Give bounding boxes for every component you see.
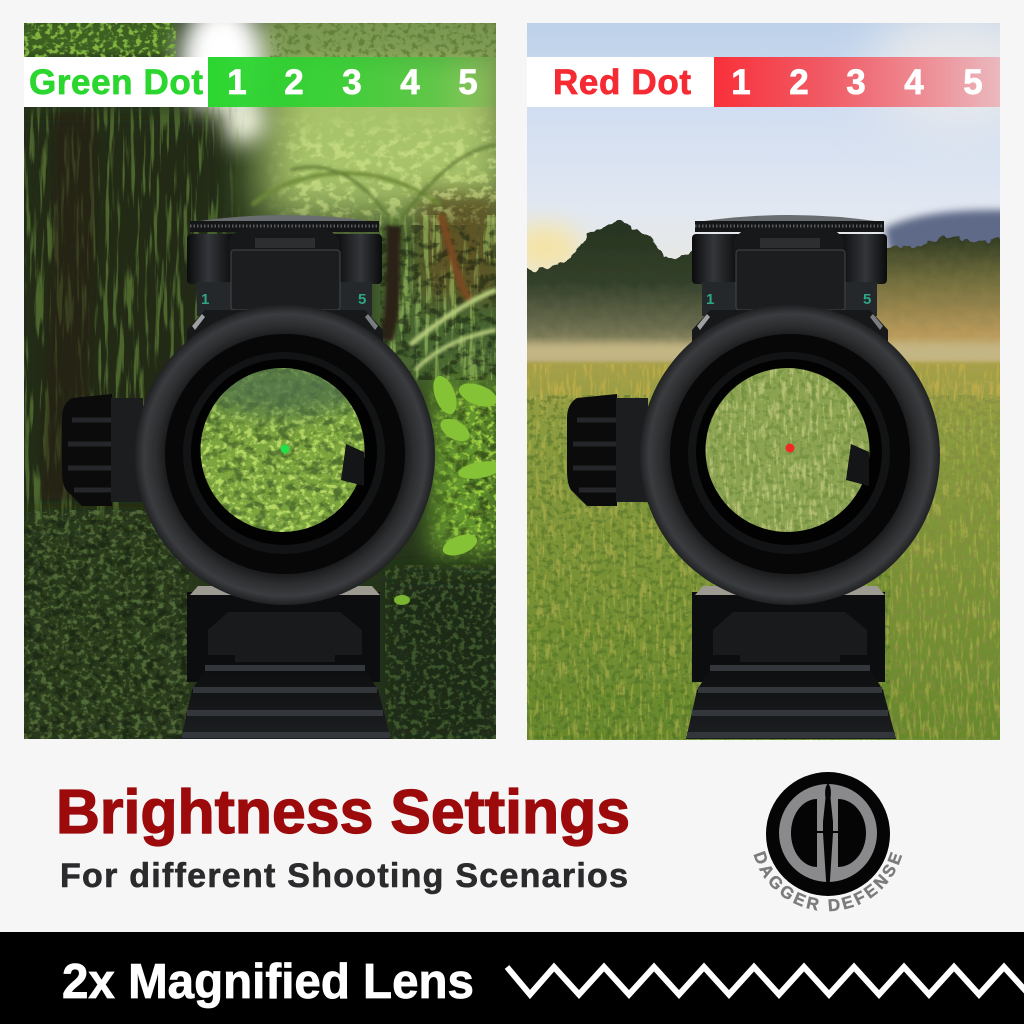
green dot label: Green Dot <box>29 63 203 102</box>
sky <box>527 23 1000 283</box>
brightness levels 1 to 5: 5 <box>963 63 983 102</box>
panel: red dot field scene <box>500 10 1024 742</box>
grass texture <box>527 364 1000 740</box>
subheading: For different Shooting Scenarios <box>60 857 628 895</box>
green dot brightness bar <box>24 57 496 107</box>
red dot brightness bar <box>527 57 1000 107</box>
heading: Brightness Settings <box>56 778 630 847</box>
jungle base foliage <box>10 2 512 745</box>
turret marking 5: 5 <box>358 291 366 308</box>
right lens view <box>705 368 870 532</box>
left scope: sight body <box>62 215 435 739</box>
jungle leaf texture <box>24 23 496 739</box>
brightness levels 1 to 5: 5 <box>458 63 478 102</box>
logo wordmark: DAGGER DEFENSE <box>754 850 902 912</box>
zigzag decoration <box>507 967 1024 994</box>
right scope: sight body <box>567 215 940 739</box>
panel: green dot jungle scene <box>10 2 512 745</box>
dagger <box>814 783 842 896</box>
turret marking 1: 1 <box>706 291 714 308</box>
red dot label: Red Dot <box>553 63 691 102</box>
lens reticle tab <box>341 444 364 486</box>
tree trunk and branches <box>62 112 496 500</box>
turret marking 1: 1 <box>201 291 209 308</box>
grass field <box>520 362 1010 742</box>
logo: Dagger Defense <box>754 772 902 912</box>
banner label: 2x Magnified Lens <box>62 955 474 1009</box>
misty tree line right <box>876 235 1000 364</box>
mist band <box>520 343 1010 363</box>
red dot reticle <box>786 444 794 452</box>
brightness levels 1 to 5: 1 <box>227 63 247 102</box>
distant cloud <box>880 204 1000 248</box>
brightness levels 1 to 5 <box>227 63 478 102</box>
brightness levels 1 to 5: 4 <box>904 63 924 102</box>
green dot reticle <box>280 444 290 454</box>
brightness levels 1 to 5: 3 <box>846 63 866 102</box>
brightness levels 1 to 5: 2 <box>789 63 809 102</box>
lens reticle tab <box>846 444 869 486</box>
brightness levels 1 to 5: 1 <box>731 63 751 102</box>
bright leaves <box>394 373 503 605</box>
bottom banner <box>0 932 1024 1024</box>
upper right haze <box>860 23 1000 132</box>
brightness levels 1 to 5 <box>731 63 983 102</box>
misty tree line left <box>527 220 704 364</box>
sunset glow <box>509 224 581 272</box>
turret marking 5: 5 <box>863 291 871 308</box>
left lens view <box>197 360 367 532</box>
brightness levels 1 to 5: 2 <box>284 63 304 102</box>
brightness levels 1 to 5: 4 <box>400 63 420 102</box>
brightness levels 1 to 5: 3 <box>342 63 362 102</box>
